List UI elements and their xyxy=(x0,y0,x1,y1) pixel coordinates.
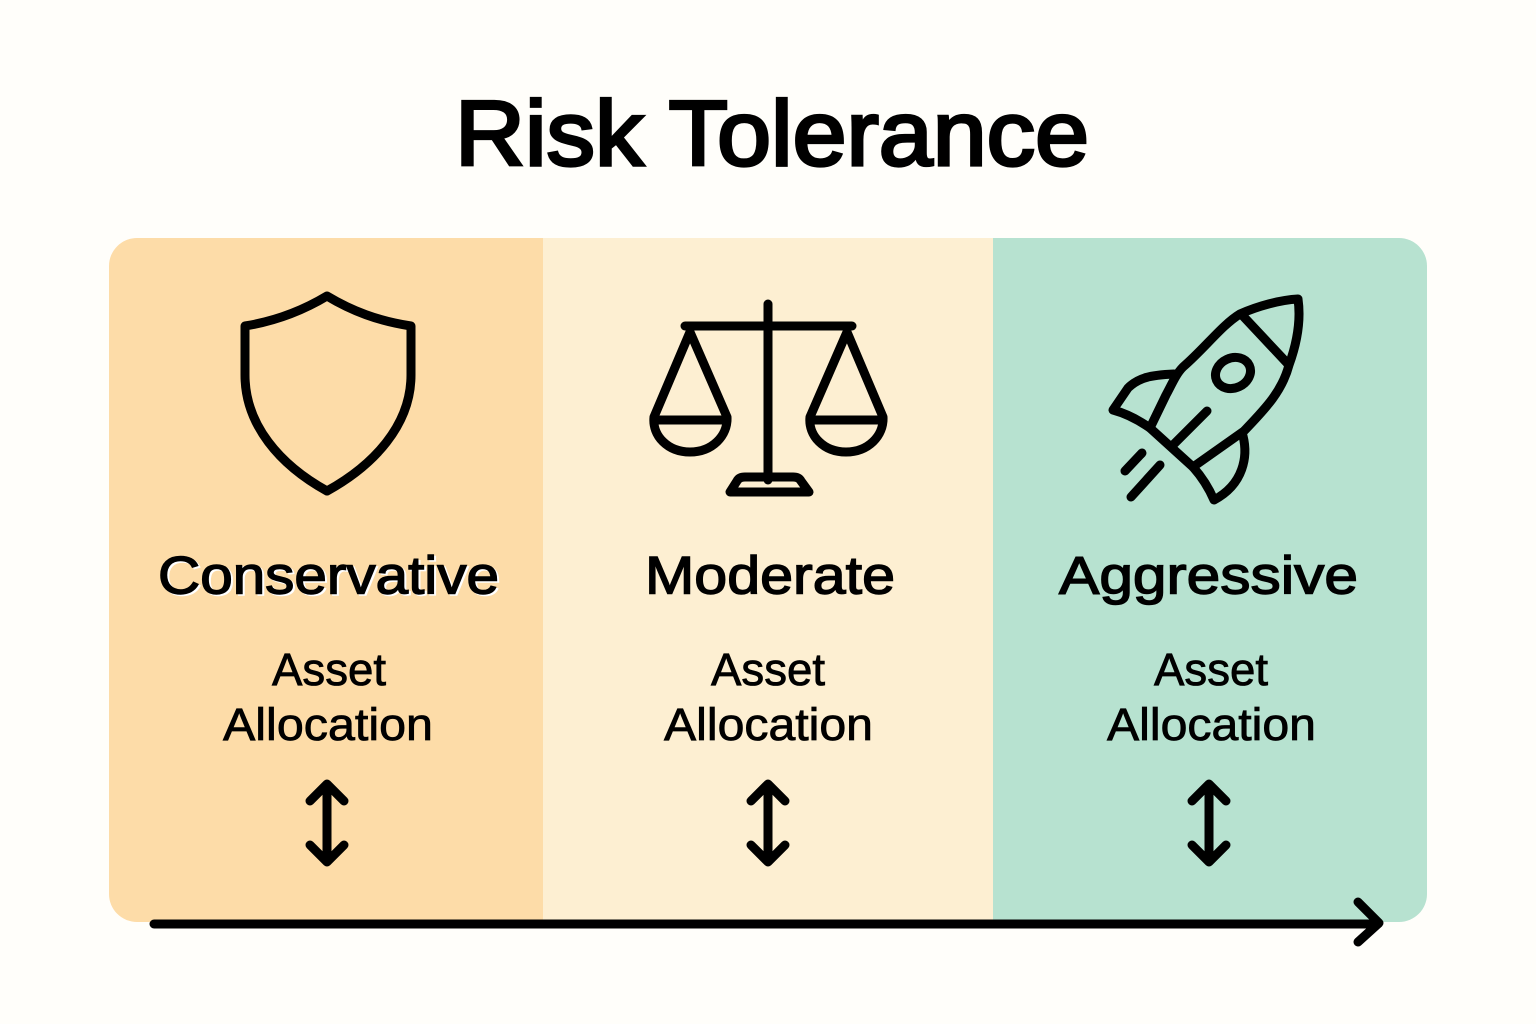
panel: conservative xyxy=(109,238,543,922)
icon: shield xyxy=(245,296,411,491)
heading: aggressive: Aggressive xyxy=(1059,546,1358,606)
icon: double arrow xyxy=(751,784,785,862)
text: asset allocation: Allocation xyxy=(664,699,873,750)
text: asset allocation: Asset xyxy=(711,644,826,695)
icon: balance scale xyxy=(654,304,883,492)
icon: double arrow xyxy=(310,784,344,862)
icon: rocket xyxy=(1113,299,1299,500)
icon: double arrow xyxy=(1192,784,1226,862)
panel: moderate xyxy=(543,238,993,922)
text: asset allocation: Asset xyxy=(1154,644,1269,695)
title: Risk Tolerance xyxy=(455,83,1089,185)
panel: aggressive xyxy=(993,238,1427,922)
text: asset allocation: Allocation xyxy=(1107,699,1316,750)
text: asset allocation xyxy=(664,644,873,750)
arrow: risk axis xyxy=(154,902,1379,942)
text: asset allocation xyxy=(1107,644,1316,750)
text: asset allocation xyxy=(223,644,433,750)
text: asset allocation: Allocation xyxy=(223,699,433,750)
heading: moderate: Moderate xyxy=(645,546,895,606)
text: asset allocation: Asset xyxy=(272,644,387,695)
heading: conservative: Conservative xyxy=(160,548,501,607)
heading: conservative: Conservative xyxy=(158,546,499,606)
